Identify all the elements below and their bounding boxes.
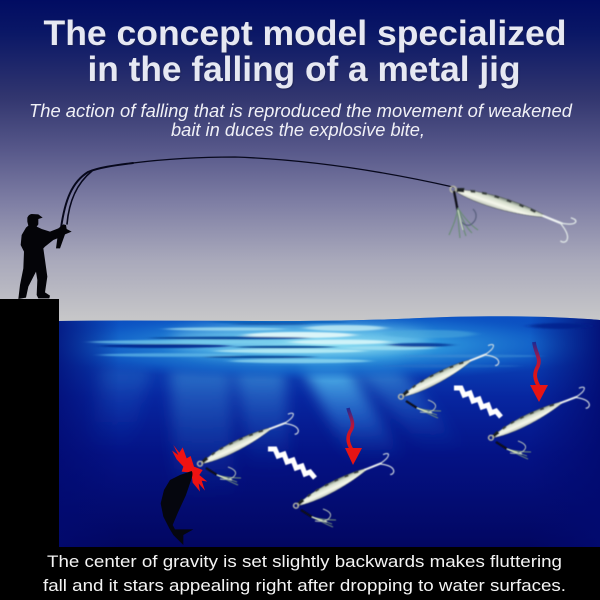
fish silhouette bbox=[161, 471, 193, 545]
zigzag falling path left bbox=[268, 449, 315, 478]
jig upper middle bbox=[395, 344, 502, 418]
title bbox=[44, 14, 566, 89]
jig on the line bbox=[446, 178, 577, 244]
bottom black band bbox=[0, 547, 600, 600]
bottom caption: The center of gravity is set slightly backwards makes fluttering bbox=[47, 553, 562, 571]
bottom caption: fall and it stars appealing right after dropping to water surfaces. bbox=[43, 577, 566, 595]
jig lower left bbox=[194, 412, 301, 485]
surface glow bbox=[78, 316, 565, 380]
bite burst bbox=[172, 445, 207, 492]
title: in the falling of a metal jig bbox=[88, 50, 520, 89]
title: The concept model specialized bbox=[44, 14, 566, 53]
sky background bbox=[0, 0, 600, 326]
angler silhouette bbox=[18, 214, 72, 299]
zigzag falling path right bbox=[454, 388, 501, 417]
bottom caption bbox=[43, 553, 566, 595]
red arrow right bbox=[530, 342, 548, 402]
jig upper right bbox=[485, 386, 592, 459]
jig lower middle bbox=[290, 453, 397, 527]
subtitle: bait in duces the explosive bite, bbox=[171, 119, 425, 140]
subtitle bbox=[29, 100, 573, 140]
pier block bbox=[0, 299, 59, 600]
subtitle: The action of falling that is reproduced the movement of weakened bbox=[29, 100, 573, 121]
fishing rod and line bbox=[61, 157, 453, 228]
surface wave streaks bbox=[90, 320, 590, 368]
underwater light rays bbox=[98, 364, 445, 475]
side falloff bbox=[59, 320, 111, 547]
sea with light rays bbox=[59, 316, 600, 547]
red arrow left bbox=[345, 408, 362, 465]
